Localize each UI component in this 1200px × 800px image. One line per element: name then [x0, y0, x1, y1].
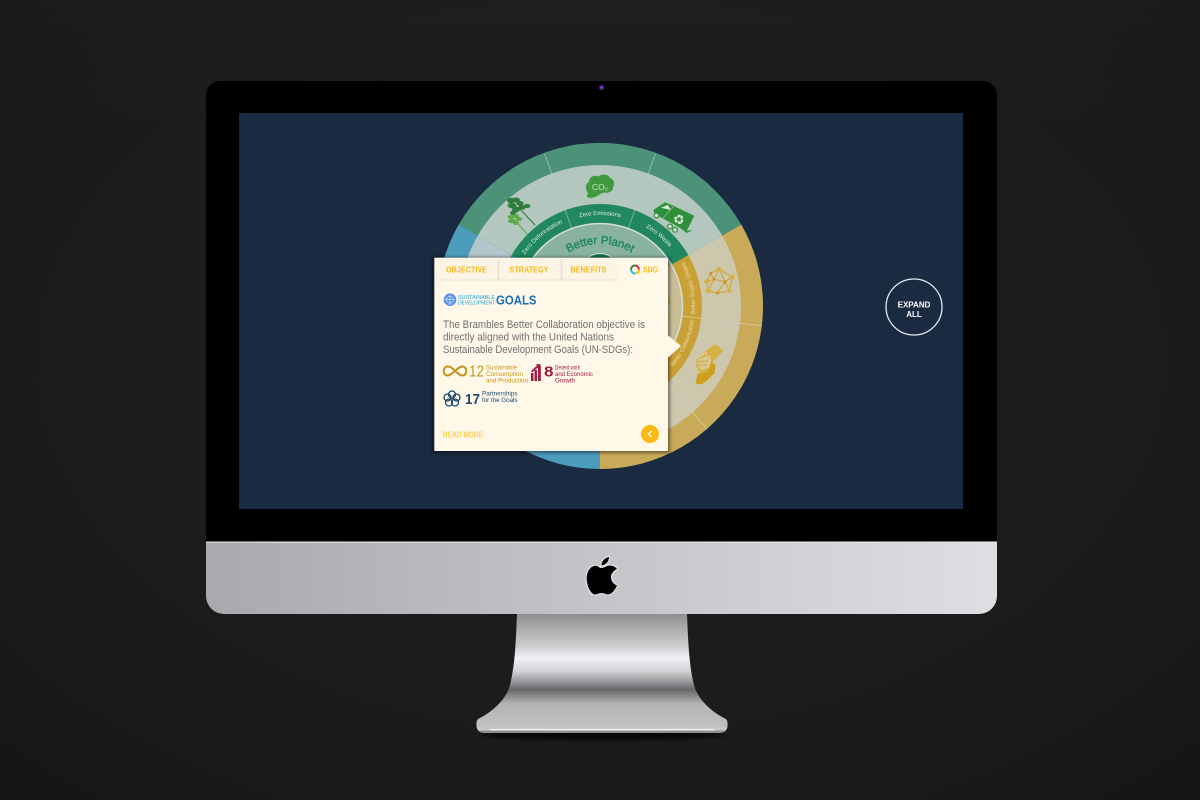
SDG 12: Sustainable	[486, 366, 518, 372]
segment: blue	[437, 224, 600, 469]
center hub	[581, 254, 619, 292]
SDG 8: 8	[544, 364, 554, 380]
icon: CO2 cloud: CO₂	[592, 182, 608, 192]
wheel diagram	[444, 142, 764, 469]
SDG 8: Growth	[555, 378, 575, 384]
label: Better Collaboration: Better Collaboration	[670, 320, 694, 366]
SDG 17: 17	[465, 391, 480, 408]
SDG 12	[444, 364, 528, 384]
SDG 12: 12	[469, 364, 484, 380]
SDG 8: Decent work	[555, 366, 581, 372]
monitor	[206, 81, 997, 740]
tabs: BENEFITS	[570, 264, 607, 274]
icon: CO2 cloud	[586, 175, 614, 198]
heading: Better Planet: Better Planet	[565, 236, 635, 253]
read more link: READ MORE	[443, 431, 484, 440]
icon: recycling truck	[653, 202, 694, 233]
body text	[443, 319, 645, 356]
icon: apple logo	[587, 557, 617, 594]
SDG 17: Partnerships	[482, 392, 518, 398]
icon: SDG ring	[631, 266, 639, 274]
icon: network	[704, 266, 735, 294]
silver chin	[206, 542, 997, 614]
segment: gold	[600, 224, 763, 469]
callout card	[432, 257, 681, 453]
SDG 8	[531, 364, 593, 384]
tabs: SDG	[643, 264, 658, 274]
SDG 17	[444, 391, 518, 408]
expand all button	[886, 279, 942, 335]
body text: directly aligned with the United Nations	[443, 332, 614, 344]
body text: Sustainable Development Goals (UN-SDGs):	[443, 344, 633, 356]
tabs	[436, 259, 658, 280]
label: Better Supply Chains: Better Supply Chains	[682, 262, 696, 314]
tabs: STRATEGY	[510, 264, 549, 274]
icon: handshake	[696, 344, 724, 384]
expand all button: EXPAND	[898, 300, 931, 310]
logo: Sustainable Development Goals: DEVELOPMENT	[458, 300, 495, 306]
label: Zero Waste: Zero Waste	[646, 224, 672, 246]
icon: trees	[507, 197, 535, 234]
tabs: OBJECTIVE	[446, 264, 487, 274]
body text: The Brambles Better Collaboration objective is	[443, 319, 645, 331]
heading: Better Business: Better Business	[668, 298, 670, 319]
SDG 8: and Economic	[555, 372, 593, 378]
SDG 12: and Production	[486, 378, 528, 384]
logo: Sustainable Development Goals: GOALS	[496, 292, 537, 308]
label: Zero Deforestation: Zero Deforestation	[522, 220, 562, 255]
logo: Sustainable Development Goals	[444, 292, 537, 308]
monitor bezel	[206, 81, 997, 542]
stand	[476, 613, 728, 740]
label: Zero Emissions: Zero Emissions	[578, 210, 621, 218]
segment: green	[459, 143, 741, 306]
icon: recycling truck: ♻	[670, 210, 687, 229]
logo: Sustainable Development Goals: SUSTAINABLE	[458, 295, 495, 301]
back button	[641, 425, 659, 443]
expand all button: ALL	[906, 310, 922, 319]
screen	[239, 113, 963, 509]
webcam	[598, 84, 604, 90]
SDG 12: Consumption	[486, 372, 523, 378]
SDG 17: for the Goals	[482, 398, 518, 404]
